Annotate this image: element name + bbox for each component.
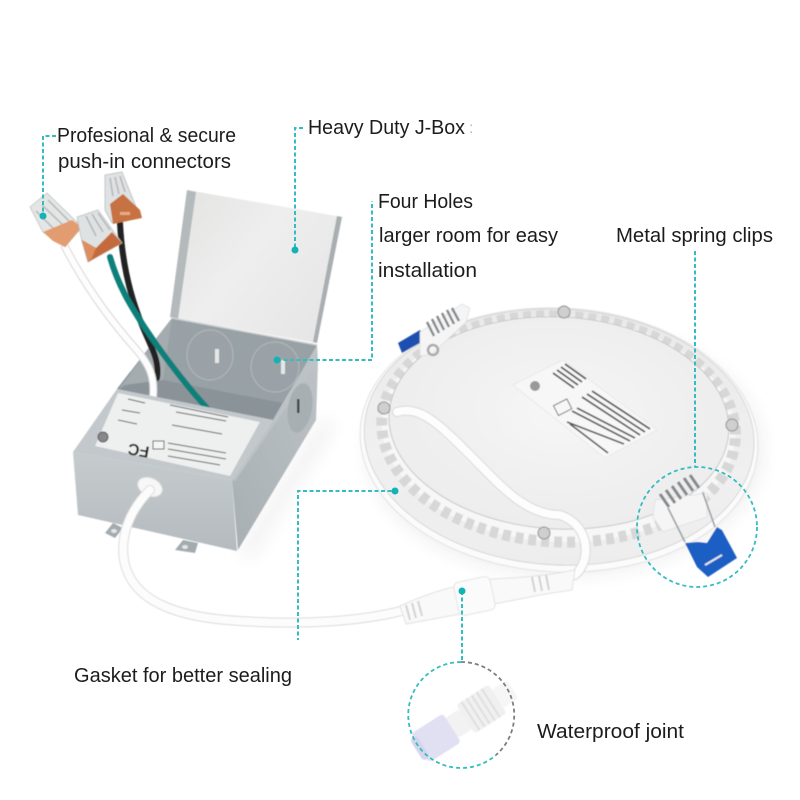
callout: gasket: Gasket for better sealing xyxy=(74,665,292,687)
callout: four holes: larger room for easy xyxy=(379,225,558,247)
callout: metal spring clips xyxy=(616,225,773,587)
callout: four holes: Four Holes xyxy=(378,191,473,213)
open lid xyxy=(170,190,342,343)
top-left spring clip xyxy=(398,304,470,356)
callout: gasket xyxy=(74,488,398,687)
waterproof connector body xyxy=(400,570,575,624)
callout: four holes: installation xyxy=(378,260,477,282)
box front wall xyxy=(73,389,273,553)
rear plate xyxy=(384,308,734,538)
white cable and waterproof connector xyxy=(123,490,405,623)
panel shadow xyxy=(367,324,763,576)
box shadow xyxy=(240,420,335,560)
cable strain relief plug xyxy=(134,473,166,501)
panel driver cable xyxy=(397,411,586,575)
mounting screws xyxy=(378,306,738,539)
callout: heavy duty j-box: : xyxy=(469,120,473,137)
callout: push-in connectors: push-in connectors xyxy=(58,151,231,173)
callout: waterproof joint: Waterproof joint xyxy=(537,721,684,743)
heat-sink fins xyxy=(376,307,741,551)
rating label printing xyxy=(98,399,228,465)
box side wall xyxy=(232,345,318,550)
callout: heavy duty j-box xyxy=(292,117,473,254)
outer trim ring xyxy=(353,298,765,582)
FC mark: FC xyxy=(126,439,151,460)
bottom-right spring clip xyxy=(653,475,737,577)
panel rating label xyxy=(513,360,657,458)
callout: four holes xyxy=(274,191,558,364)
callout: heavy duty j-box: Heavy Duty J-Box xyxy=(308,117,465,139)
round LED panel xyxy=(353,298,765,624)
J-box product photo xyxy=(30,172,342,560)
push-in connectors xyxy=(30,172,142,262)
callout: metal spring clips: Metal spring clips xyxy=(616,225,773,247)
callout: push-in connectors xyxy=(40,125,236,220)
wires xyxy=(65,223,207,408)
box interior xyxy=(117,318,317,420)
callout: push-in connectors: Profesional & secure xyxy=(57,125,236,147)
joint detail inset xyxy=(407,675,522,765)
callout: waterproof joint xyxy=(408,588,684,768)
